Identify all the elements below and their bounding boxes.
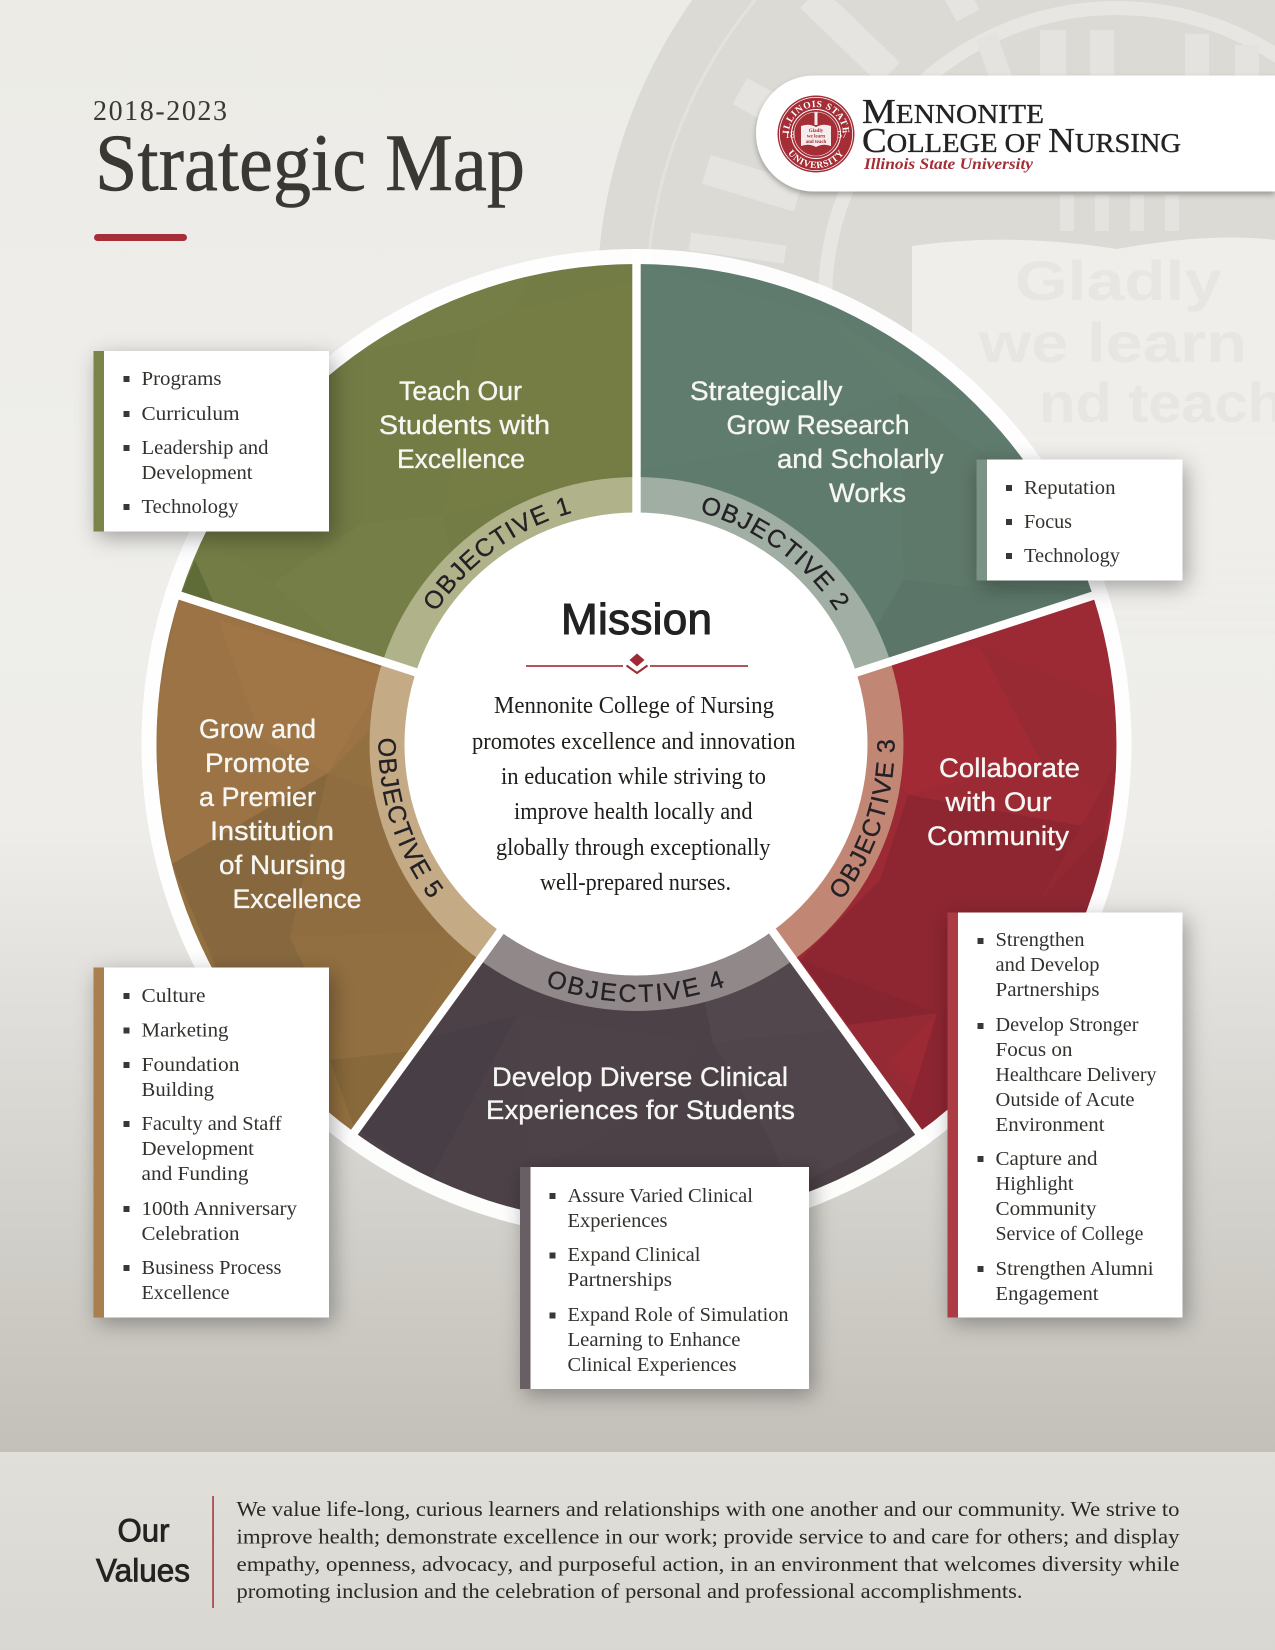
panel: objective 5 list: Marketing <box>142 1020 228 1042</box>
panel: objective 5 list: Building <box>142 1079 214 1101</box>
watermark: university seal: nd teach <box>1039 371 1275 434</box>
values statement: improve health; demonstrate excellence in our work; provide service to and care for others; and display <box>236 1524 1180 1548</box>
strategy wheel <box>142 249 1132 1225</box>
mission heading: Mission <box>561 595 712 644</box>
college name: MENNONITE <box>862 92 1044 131</box>
values heading: Values <box>96 1552 190 1588</box>
panel: objective 1 list <box>94 351 329 532</box>
panel: objective 4 list: Expand Role of Simulation <box>568 1304 788 1326</box>
values statement <box>236 1497 1180 1603</box>
red accent bar <box>94 234 187 241</box>
heading: objective 2: Works <box>829 478 906 508</box>
objective 4 label: OBJECTIVE 4 <box>548 970 724 1002</box>
panel: objective 5 list: Celebration <box>142 1223 240 1245</box>
objective 5 label: OBJECTIVE 5 <box>378 738 444 897</box>
panel: objective 1 list: Programs <box>142 368 222 390</box>
panel: objective 3 list: Strengthen Alumni <box>996 1258 1154 1280</box>
college name <box>862 92 1181 160</box>
mission divider with diamond <box>526 654 748 673</box>
heading: objective 3: Community <box>927 821 1070 851</box>
panel: objective 3 list: Focus on <box>996 1039 1072 1061</box>
heading: objective 4: Experiences for Students <box>486 1095 795 1125</box>
icon: Illinois State University seal: UNIVERSITY <box>789 149 843 168</box>
panel: objective 5 list: Excellence <box>142 1282 230 1304</box>
panel: objective 5 list: Development <box>142 1138 254 1160</box>
center mission circle <box>404 512 868 976</box>
panel: objective 2 list: Technology <box>1024 545 1121 567</box>
heading: objective 5: Institution <box>210 816 334 846</box>
panel: objective 1 list: Technology <box>142 496 239 518</box>
heading: objective 3: with Our <box>944 787 1052 817</box>
watermark: university seal: Gladly <box>1015 249 1222 312</box>
mission statement <box>472 692 796 896</box>
wedge: objective 5 brown <box>156 600 476 1130</box>
panel: objective 2 list <box>976 460 1182 580</box>
panel: objective 3 list: Healthcare Delivery <box>996 1064 1157 1086</box>
objective 1 label: OBJECTIVE 1 <box>425 498 572 608</box>
mission statement: Mennonite College of Nursing <box>494 692 774 719</box>
panel: objective 4 list: Clinical Experiences <box>568 1354 737 1376</box>
icon: Illinois State University seal: 57 <box>837 130 847 141</box>
wedge: objective 4 dark plum <box>358 962 916 1210</box>
values statement: promoting inclusion and the celebration of personal and professional accomplishments. <box>236 1579 1022 1603</box>
panel: objective 4 list: Experiences <box>568 1210 668 1232</box>
mission statement: in education while striving to <box>501 763 766 790</box>
panel: objective 5 list: Foundation <box>142 1054 240 1076</box>
heading: objective 5: of Nursing <box>219 850 346 880</box>
panel: objective 5 list <box>94 968 329 1318</box>
panel: objective 3 list: Develop Stronger <box>996 1014 1139 1036</box>
panel: objective 4 list: Expand Clinical <box>568 1244 701 1266</box>
panel: objective 5 list: 100th Anniversary <box>142 1198 298 1220</box>
vertical red rule <box>212 1496 214 1608</box>
icon: Illinois State University seal <box>778 96 854 172</box>
panel: objective 5 list: and Funding <box>142 1163 248 1185</box>
heading: objective 1 <box>379 376 550 474</box>
heading: Strategic Map <box>95 117 525 208</box>
heading: objective 3: Collaborate <box>939 753 1080 783</box>
icon: Illinois State University seal: Gladly <box>809 129 824 134</box>
icon: Illinois State University seal: and teach <box>806 140 827 145</box>
wedge: objective 2 teal <box>640 264 1092 658</box>
heading: objective 4: Develop Diverse Clinical <box>492 1062 788 1092</box>
panel: objective 3 list: Environment <box>996 1114 1105 1136</box>
heading: objective 2: Strategically <box>690 376 843 406</box>
panel: our values footer <box>0 1452 1275 1650</box>
wedge dividers <box>166 249 1107 1144</box>
mission statement: improve health locally and <box>514 798 752 825</box>
heading: objective 4 <box>486 1062 795 1125</box>
panel: objective 3 list: Strengthen <box>996 929 1084 951</box>
panel: objective 3 list: Service of College <box>996 1223 1144 1245</box>
icon: Illinois State University seal: we learn <box>807 134 825 140</box>
panel: objective 5 list: Culture <box>142 985 206 1007</box>
values heading: Our <box>118 1512 170 1548</box>
values heading <box>96 1512 190 1588</box>
panel: objective 1 list: Development <box>142 462 253 484</box>
panel: objective 3 list: and Develop <box>996 954 1100 976</box>
heading: objective 5: Grow and <box>199 714 316 744</box>
date range: 2018-2023 <box>93 96 227 127</box>
heading: objective 1: Excellence <box>397 444 525 474</box>
college name: COLLEGE OF NURSING <box>862 121 1181 160</box>
panel: objective 3 list: Outside of Acute <box>996 1089 1134 1111</box>
objective 2 label: OBJECTIVE 2 <box>702 498 848 610</box>
outer white ring <box>142 249 1132 1239</box>
heading: objective 2: Grow Research <box>726 410 910 440</box>
panel: objective 4 list: Partnerships <box>568 1269 672 1291</box>
mission statement: well-prepared nurses. <box>540 869 731 896</box>
panel: objective 3 list: Partnerships <box>996 979 1100 1001</box>
heading: objective 5: a Premier <box>199 782 316 812</box>
values statement: empathy, openness, advocacy, and purposeful action, in an environment that welcomes diversity while <box>236 1552 1180 1576</box>
panel: objective 2 list: Reputation <box>1024 477 1116 499</box>
panel: objective 3 list: Capture and <box>996 1148 1098 1170</box>
mission statement: globally through exceptionally <box>496 834 771 861</box>
panel: objective 3 list: Community <box>996 1198 1097 1220</box>
heading: objective 3 <box>927 753 1080 851</box>
logo pill <box>753 75 1275 198</box>
university name: Illinois State University <box>863 156 1034 173</box>
title block <box>93 96 525 241</box>
values statement: We value life-long, curious learners and relationships with one another and our community. We strive to <box>236 1497 1180 1521</box>
mission statement: promotes excellence and innovation <box>472 728 796 755</box>
heading: objective 5: Excellence <box>232 884 362 914</box>
heading: objective 2: and Scholarly <box>777 444 944 474</box>
panel: objective 4 list: Assure Varied Clinical <box>568 1185 753 1207</box>
wedge: objective 3 red <box>796 600 1116 1130</box>
heading: objective 5: Promote <box>205 748 310 778</box>
objective 3 label: OBJECTIVE 3 <box>831 740 895 897</box>
panel: objective 2 list: Focus <box>1024 511 1072 533</box>
objective ring segments <box>370 477 903 1011</box>
heading: objective 1: Teach Our <box>399 376 522 406</box>
panel: objective 4 list: Learning to Enhance <box>568 1329 740 1351</box>
panel: objective 5 list: Faculty and Staff <box>142 1113 282 1135</box>
panel: objective 1 list: Curriculum <box>142 403 240 425</box>
wedge: objective 1 olive <box>181 264 632 658</box>
panel: objective 3 list: Engagement <box>996 1283 1099 1305</box>
panel: objective 5 list: Business Process <box>142 1257 282 1279</box>
icon: Illinois State University seal: 18 <box>785 130 795 141</box>
panel: objective 3 list: Highlight <box>996 1173 1074 1195</box>
icon: Illinois State University seal: ILLINOIS STATE <box>782 100 850 134</box>
watermark: university seal <box>600 0 1275 422</box>
panel: objective 1 list: Leadership and <box>142 437 268 459</box>
heading: objective 1: Students with <box>379 410 550 440</box>
watermark: university seal: we learn <box>978 311 1247 374</box>
heading: objective 2 <box>690 376 944 508</box>
panel: objective 3 list <box>948 912 1182 1318</box>
heading: objective 5 <box>199 714 362 914</box>
panel: objective 4 list <box>520 1167 809 1389</box>
